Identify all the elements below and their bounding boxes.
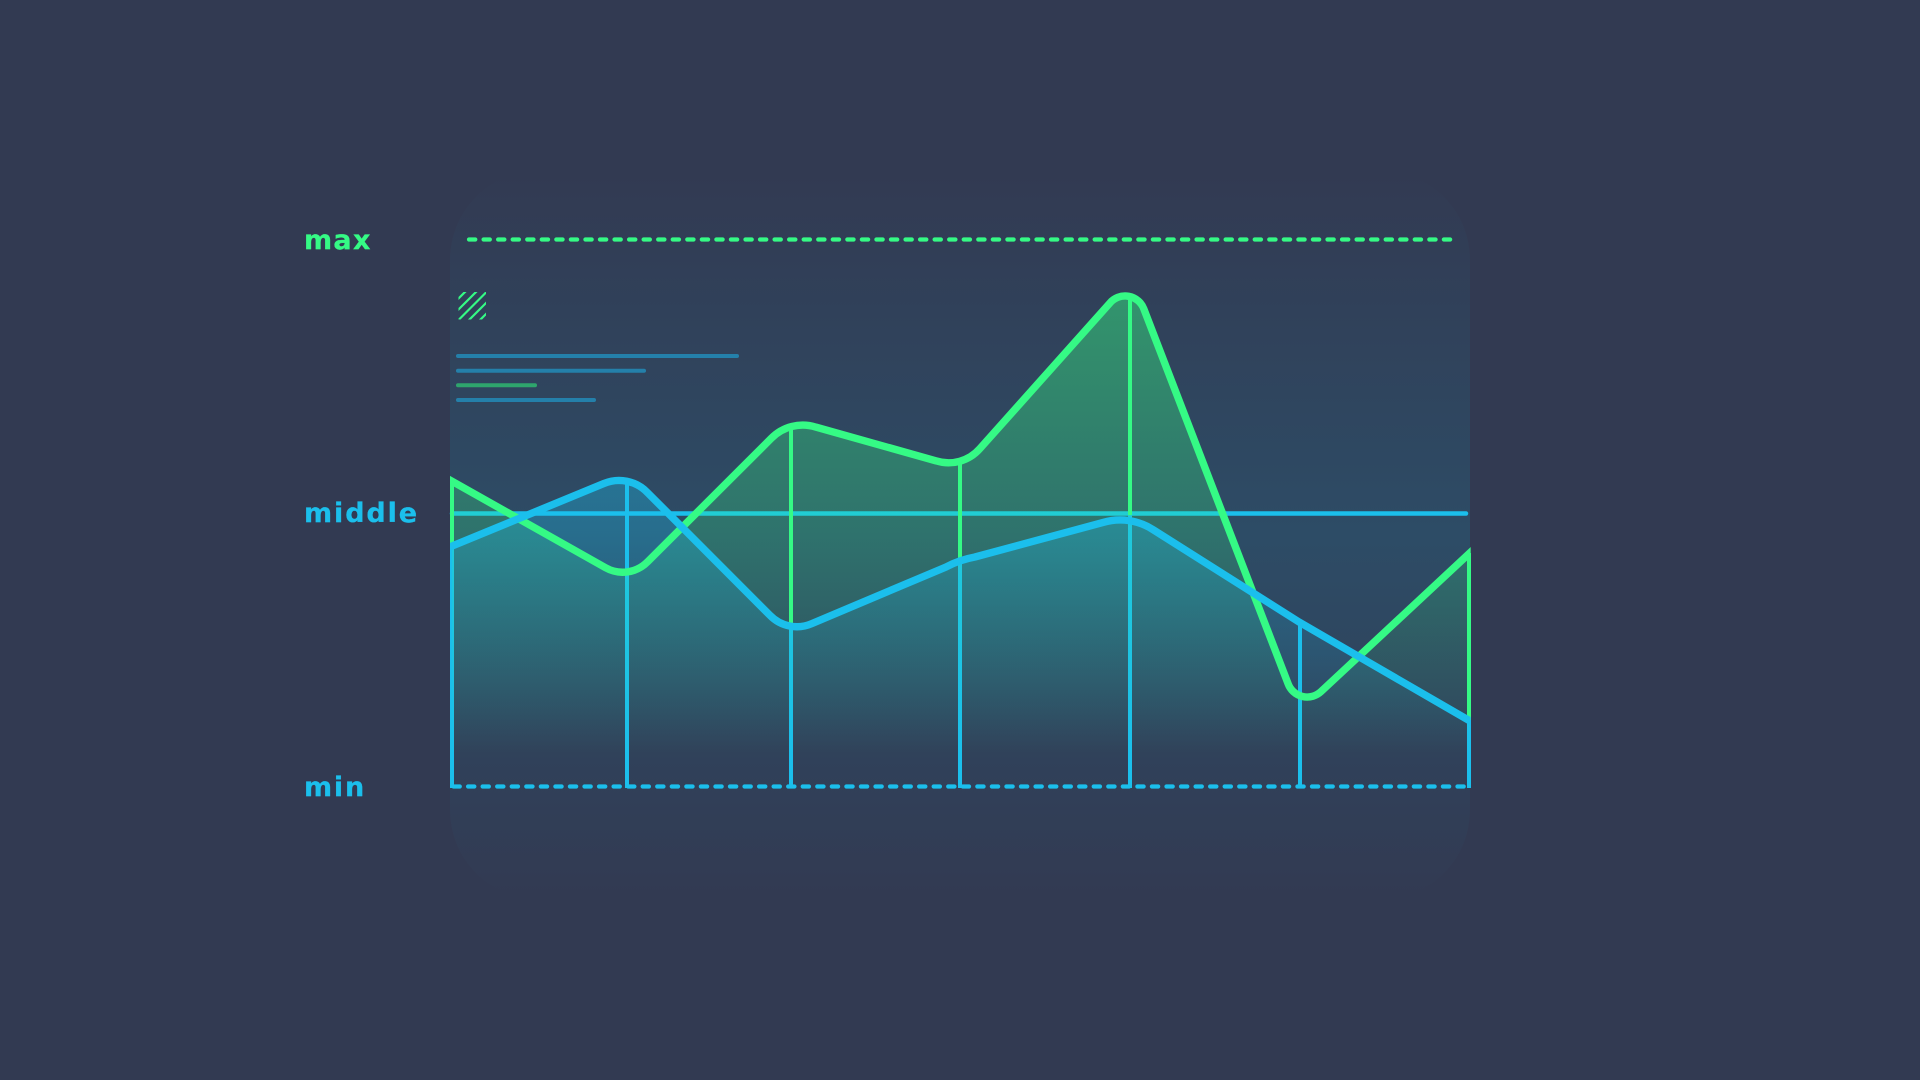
label: min: min (304, 772, 366, 803)
vertical drop lines: lower blue segments (452, 481, 1469, 788)
legend placeholder lines (458, 356, 737, 400)
line: green series (448, 296, 1474, 697)
area fill: blue series (452, 480, 1470, 786)
min dashed line (454, 784, 1469, 789)
label: middle: middle (304, 498, 419, 529)
label: max: max (304, 225, 372, 256)
line: blue series (448, 480, 1474, 723)
icon: hatched square (458, 292, 486, 320)
middle line (452, 511, 1466, 516)
vertical drop lines: upper green segments (452, 296, 1469, 720)
area fill: green series (452, 296, 1470, 786)
panel: chart backdrop (450, 170, 1470, 900)
max dashed line (469, 237, 1450, 242)
